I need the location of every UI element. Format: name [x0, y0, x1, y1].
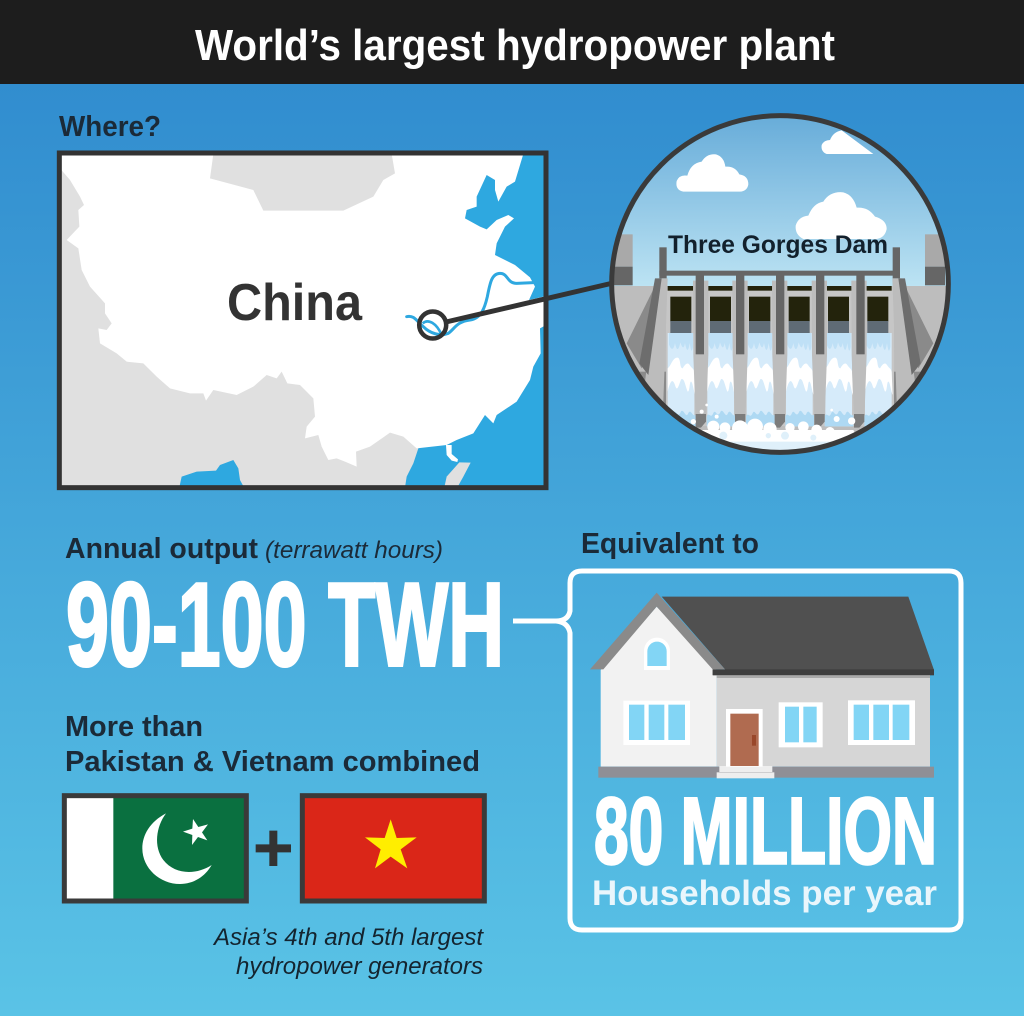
title bar: World’s largest hydropower plant — [195, 21, 835, 70]
map label: China — [227, 274, 363, 332]
map frame — [59, 153, 546, 488]
heading: where: Where? — [59, 111, 161, 143]
coastal strip — [446, 445, 458, 462]
foam — [702, 430, 854, 442]
text: annual output label: Annual output — [65, 533, 258, 565]
flags — [64, 796, 484, 901]
caption: Asia’s 4th and 5th largest — [212, 924, 484, 951]
piers — [693, 281, 867, 420]
spillway water — [667, 333, 696, 426]
caption: hydropower generators — [236, 953, 483, 980]
rivers — [407, 273, 533, 335]
embankments — [614, 286, 946, 432]
caption — [212, 924, 484, 980]
text: annual output label: (terrawatt hours) — [265, 537, 443, 564]
heading: equivalent: Equivalent to — [581, 528, 759, 560]
end abutments — [645, 278, 668, 402]
gulf of Tonkin — [179, 460, 244, 487]
title bar — [0, 0, 1024, 84]
lens rim — [612, 116, 948, 452]
icon: plus — [256, 831, 291, 866]
sea — [405, 154, 546, 487]
clouds — [676, 130, 887, 239]
pointer line and location marker — [419, 283, 613, 338]
dam label: Three Gorges Dam — [668, 231, 888, 259]
Taiwan — [444, 462, 471, 487]
gate openings — [670, 297, 888, 321]
panel: dam illustration — [610, 115, 950, 455]
towers — [613, 234, 633, 267]
flag: Pakistan — [64, 796, 246, 901]
text: comparison heading: Pakistan & Vietnam combined — [65, 746, 480, 778]
big number: output: 90-100 TWH — [66, 558, 504, 692]
flag: Vietnam — [302, 796, 484, 901]
deck — [659, 271, 900, 276]
icon: house — [590, 593, 934, 778]
panel: China map — [59, 153, 546, 488]
text: annual output label — [65, 533, 443, 565]
China landmass — [60, 154, 546, 467]
connector and callout box — [513, 571, 961, 930]
text: comparison heading — [65, 711, 480, 778]
text: comparison heading: More than — [65, 711, 203, 743]
dam body — [666, 286, 894, 426]
text: households per year: Households per year — [592, 874, 937, 913]
